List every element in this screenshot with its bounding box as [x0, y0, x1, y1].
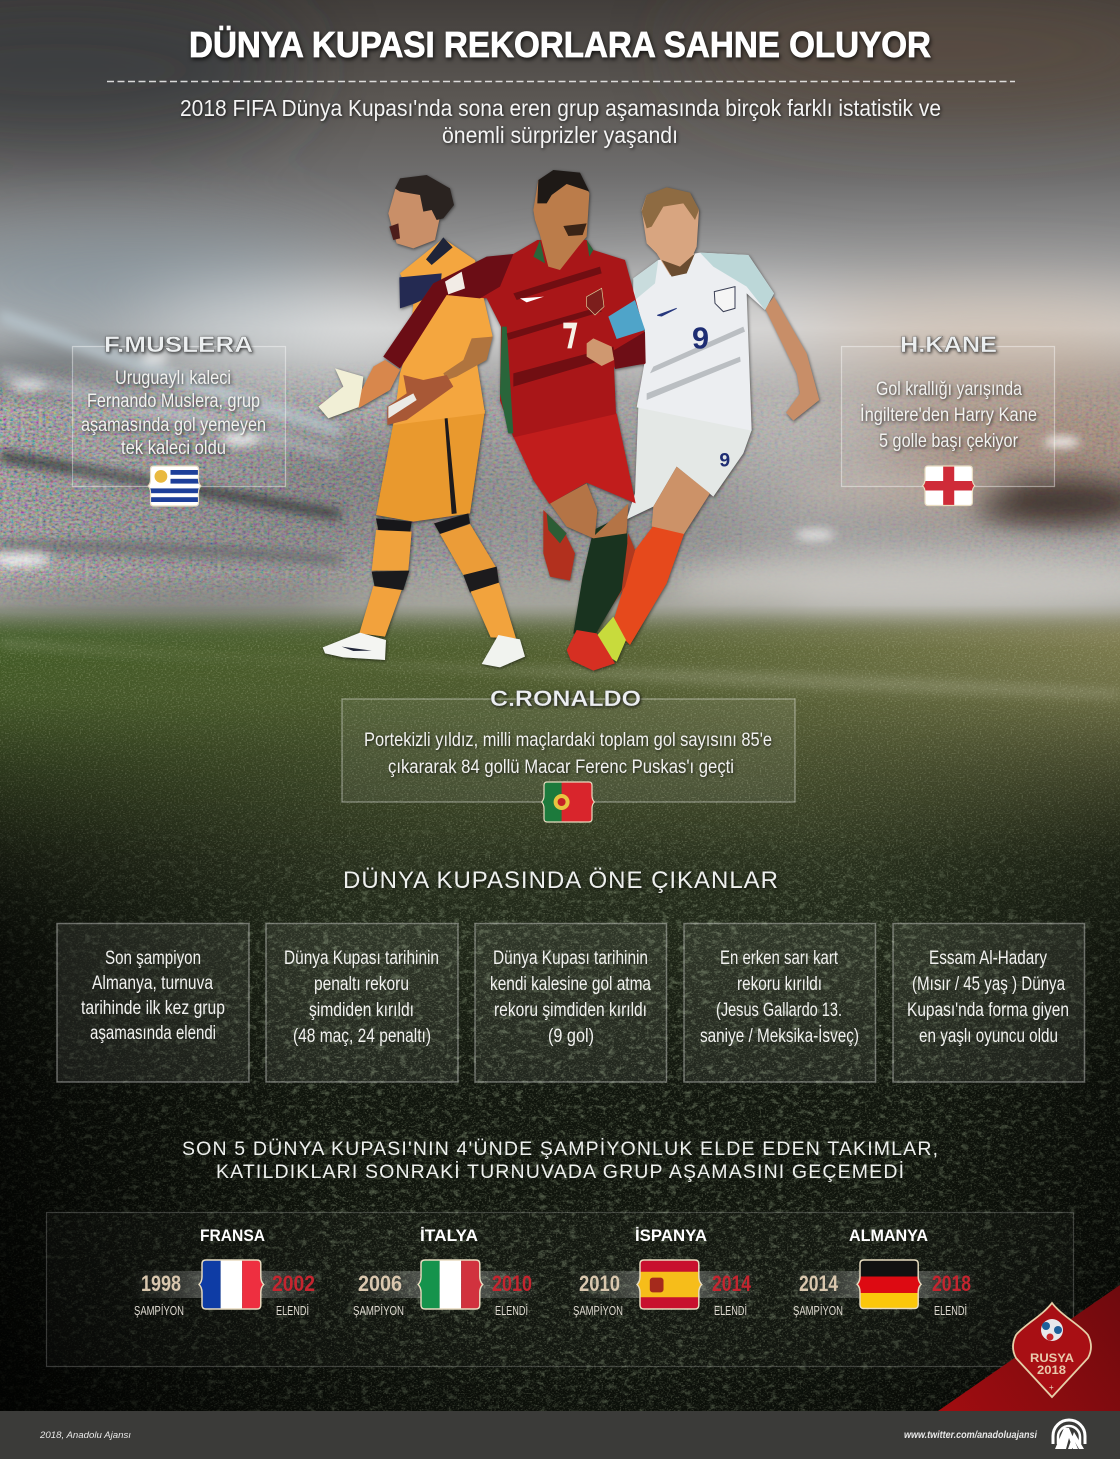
- heading: champions curse: [182, 1137, 938, 1183]
- card 1: Almanya, turnuva: [92, 973, 213, 994]
- team: İspanya: ELENDİ: [714, 1303, 747, 1318]
- team: Fransa: ŞAMPİYON: [134, 1303, 184, 1318]
- team: Fransa: FRANSA: [200, 1226, 265, 1245]
- team: İspanya: ŞAMPİYON: [573, 1303, 623, 1318]
- name: C.Ronaldo: C.RONALDO: [490, 686, 641, 711]
- badge: Rusya 2018: +: [1049, 1383, 1054, 1392]
- heading: champions curse: KATILDIKLARI SONRAKİ TURNUVADA GRUP AŞAMASINI GEÇEMEDİ: [216, 1160, 904, 1183]
- card 5: en yaşlı oyuncu oldu: [919, 1026, 1058, 1047]
- red corner triangle: [938, 1285, 1120, 1411]
- panel: Kane: [842, 332, 1054, 506]
- grass: [0, 608, 1120, 822]
- card 1: Son şampiyon: [105, 948, 201, 969]
- team: İtalya: ELENDİ: [495, 1303, 528, 1318]
- divider dashes: [107, 80, 1015, 82]
- flag: Uruguay: [148, 466, 201, 506]
- flag: Germany: [857, 1260, 921, 1308]
- card 3: [475, 924, 666, 1082]
- card 5: Essam Al-Hadary: [929, 948, 1047, 969]
- team: Almanya: 2018: [932, 1271, 971, 1296]
- team: İspanya: İSPANYA: [635, 1226, 707, 1245]
- card 3: (9 gol): [548, 1026, 594, 1047]
- badge: Rusya 2018: [1013, 1303, 1091, 1397]
- players illustration: [318, 170, 819, 671]
- text: Muslera description: Fernando Muslera, grup: [87, 391, 260, 412]
- card 2: penaltı rekoru: [314, 974, 409, 995]
- panel: Muslera: [72, 332, 286, 506]
- text: Ronaldo description: Portekizli yıldız, milli maçlardaki toplam gol sayısını 85'e: [364, 730, 772, 751]
- sky tints: [0, 0, 1120, 595]
- card 4: En erken sarı kart: [720, 948, 839, 969]
- player: Ronaldo: [383, 170, 646, 671]
- stands and fog: [0, 360, 1120, 610]
- panel: champions frame: [46, 1212, 1074, 1366]
- text: Kane description: [860, 379, 1037, 452]
- footer twitter link: www.twitter.com/anadoluajansi: [904, 1430, 1037, 1441]
- name: H.Kane: H.KANE: [900, 332, 997, 357]
- player: Kane: 9: [692, 322, 709, 356]
- team: İspanya: 2010: [579, 1271, 620, 1296]
- team: İtalya: 2006: [358, 1271, 402, 1296]
- card 5: (Mısır / 45 yaş ) Dünya: [912, 974, 1065, 995]
- card 4: saniye / Meksika-İsveç): [700, 1026, 859, 1047]
- card 2: (48 maç, 24 penaltı): [293, 1026, 431, 1047]
- title: DÜNYA KUPASI REKORLARA SAHNE OLUYOR: [189, 24, 931, 65]
- text: Ronaldo description: [364, 730, 772, 778]
- team: Almanya: ALMANYA: [849, 1226, 928, 1245]
- text: Muslera description: Uruguaylı kaleci: [115, 368, 231, 389]
- text: Kane description: 5 golle başı çekiyor: [879, 431, 1019, 452]
- footer credit: 2018, Anadolu Ajansı: [39, 1430, 131, 1441]
- card 4: [684, 924, 876, 1082]
- heading: champions curse: SON 5 DÜNYA KUPASI'NIN 4'ÜNDE ŞAMPİYONLUK ELDE EDEN TAKIMLAR,: [182, 1137, 938, 1160]
- card 5: Kupası'nda forma giyen: [907, 1000, 1069, 1021]
- team: Almanya: [790, 1226, 978, 1318]
- card 2: [266, 924, 458, 1082]
- badge: Rusya 2018: 2018: [1037, 1363, 1066, 1377]
- player: Kane: [596, 187, 819, 662]
- card 2: şimdiden kırıldı: [309, 1000, 414, 1021]
- team: İtalya: 2010: [492, 1271, 532, 1296]
- team: Almanya: 2014: [799, 1271, 839, 1296]
- flag: England: [923, 466, 975, 506]
- team: İtalya: [348, 1226, 540, 1318]
- flag: France: [199, 1260, 264, 1309]
- player: Muslera: [318, 175, 525, 667]
- team: Fransa: 2002: [272, 1271, 315, 1296]
- team: İspanya: 2014: [712, 1271, 752, 1296]
- team: Almanya: ŞAMPİYON: [793, 1303, 843, 1318]
- footer bar: [0, 1411, 1120, 1459]
- flag: Portugal: [542, 782, 594, 822]
- card 4: rekoru kırıldı: [737, 974, 822, 995]
- team: Almanya: ELENDİ: [934, 1303, 967, 1318]
- card 2: Dünya Kupası tarihinin: [284, 948, 439, 969]
- text: Muslera description: tek kaleci oldu: [121, 438, 226, 459]
- card 1: aşamasında elendi: [90, 1023, 216, 1044]
- card 1: [57, 924, 249, 1082]
- subtitle: [180, 95, 941, 148]
- heading: highlights: DÜNYA KUPASINDA ÖNE ÇIKANLAR: [343, 867, 778, 894]
- team: İtalya: ŞAMPİYON: [353, 1303, 404, 1318]
- team: Fransa: [130, 1226, 321, 1318]
- flag: Spain: [637, 1260, 702, 1309]
- text: Muslera description: [81, 368, 266, 459]
- card 3: Dünya Kupası tarihinin: [493, 948, 648, 969]
- name: F.Muslera: F.MUSLERA: [104, 332, 253, 357]
- player: Kane: 9: [719, 451, 730, 472]
- badge: Rusya 2018: RUSYA: [1030, 1351, 1074, 1365]
- card 5: [893, 924, 1084, 1082]
- card 1: tarihinde ilk kez grup: [81, 998, 225, 1019]
- card 3: kendi kalesine gol atma: [490, 974, 651, 995]
- logo: Anadolu Agency: [1053, 1420, 1085, 1449]
- card 4: (Jesus Gallardo 13.: [716, 1000, 842, 1021]
- text: Kane description: İngiltere'den Harry Kane: [860, 405, 1037, 426]
- text: Muslera description: aşamasında gol yemeyen: [81, 415, 266, 436]
- team: Fransa: 1998: [141, 1271, 181, 1296]
- team: İtalya: İTALYA: [420, 1226, 478, 1245]
- card 3: rekoru şimdiden kırıldı: [494, 1000, 647, 1021]
- panel: Ronaldo: [342, 686, 795, 822]
- text: Kane description: Gol krallığı yarışında: [876, 379, 1022, 400]
- subtitle: 2018 FIFA Dünya Kupası'nda sona eren grup aşamasında birçok farklı istatistik ve: [180, 95, 941, 121]
- team: Fransa: ELENDİ: [276, 1303, 309, 1318]
- flag: Italy: [418, 1260, 483, 1309]
- text: Ronaldo description: çıkararak 84 gollü Macar Ferenc Puskas'ı geçti: [388, 757, 734, 778]
- team: İspanya: [570, 1226, 759, 1318]
- subtitle: önemli sürprizler yaşandı: [442, 122, 678, 148]
